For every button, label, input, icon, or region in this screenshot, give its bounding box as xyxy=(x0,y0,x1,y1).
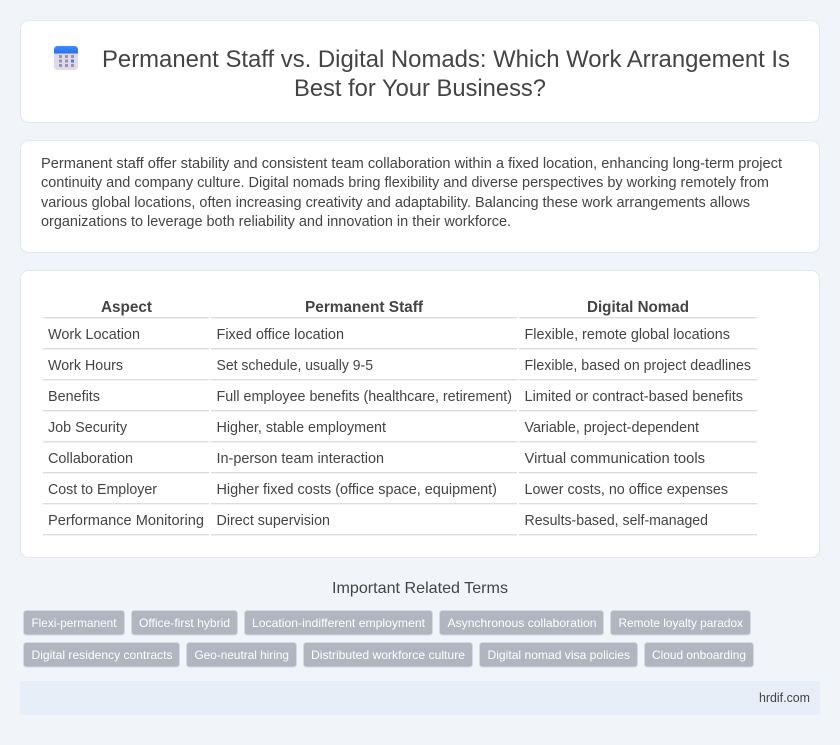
row: performance monitoring: Direct supervision xyxy=(216,513,330,529)
row: work hours xyxy=(43,358,757,380)
summary text: various global locations, often increasing creativity and adaptability. Balancing these work arrangements allows xyxy=(41,195,750,211)
title: Best for Your Business? xyxy=(294,75,546,102)
summary text xyxy=(41,156,782,230)
row: job security: Higher, stable employment xyxy=(216,420,386,436)
icon: calendar xyxy=(54,46,78,70)
tag row 2: Cloud onboarding xyxy=(652,648,746,662)
row: work hours: Work Hours xyxy=(48,358,123,374)
tag row 1 xyxy=(24,610,750,635)
row: cost to employer: Lower costs, no office expenses xyxy=(524,482,728,498)
row: collaboration xyxy=(43,451,757,473)
footer source: hrdif.com xyxy=(759,690,810,705)
row: benefits: Benefits xyxy=(48,389,100,405)
title xyxy=(102,46,790,102)
tag row 2 xyxy=(24,642,754,667)
related term tags xyxy=(24,610,754,667)
row: benefits: Full employee benefits (healthcare, retirement) xyxy=(216,389,512,405)
row: work hours: Flexible, based on project deadlines xyxy=(524,358,751,374)
row: work location: Flexible, remote global locations xyxy=(524,327,730,343)
tag row 1: Asynchronous collaboration xyxy=(448,616,596,630)
row: cost to employer: Cost to Employer xyxy=(48,482,157,498)
row: job security: Job Security xyxy=(48,420,128,436)
row: performance monitoring: Results-based, self-managed xyxy=(524,513,708,529)
row: collaboration: Virtual communication tools xyxy=(524,451,705,467)
tag row 1: Location-indifferent employment xyxy=(252,616,426,630)
row: benefits: Limited or contract-based benefits xyxy=(524,389,743,405)
row: benefits xyxy=(43,389,757,411)
panel: summary paragraph xyxy=(20,140,820,252)
row: work location: Fixed office location xyxy=(216,327,344,343)
tag row 2: Geo-neutral hiring xyxy=(194,648,289,662)
row: collaboration: In-person team interaction xyxy=(216,451,384,467)
row: job security: Variable, project-dependent xyxy=(524,420,699,436)
row: performance monitoring: Performance Monitoring xyxy=(48,513,204,529)
panel: comparison table xyxy=(20,270,820,558)
row: cost to employer xyxy=(43,482,757,504)
row: performance monitoring xyxy=(43,513,757,535)
summary text: Permanent staff offer stability and consistent team collaboration within a fixed location, enhancing long-term project xyxy=(41,156,782,172)
table header row: Permanent Staff xyxy=(305,299,424,316)
row: work hours: Set schedule, usually 9-5 xyxy=(216,358,373,374)
panel: title header xyxy=(20,20,820,122)
summary text: continuity and company culture. Digital nomads bring flexibility and diverse perspectives by working remotely from xyxy=(41,175,769,191)
row: work location xyxy=(43,327,757,349)
table header row xyxy=(43,299,757,318)
row: job security xyxy=(43,420,757,442)
tag row 2: Digital nomad visa policies xyxy=(488,648,630,662)
tag row 2: Digital residency contracts xyxy=(32,648,172,662)
tag row 1: Office-first hybrid xyxy=(139,616,230,630)
row: collaboration: Collaboration xyxy=(48,451,133,467)
title: Permanent Staff vs. Digital Nomads: Which Work Arrangement Is xyxy=(102,46,790,73)
heading: important related terms: Important Related Terms xyxy=(332,580,508,597)
summary text: organizations to leverage both reliability and innovation in their workforce. xyxy=(41,214,511,230)
tag row 1: Remote loyalty paradox xyxy=(618,616,743,630)
tag row 1: Flexi-permanent xyxy=(32,616,117,630)
tag row 2: Distributed workforce culture xyxy=(311,648,465,662)
footer bar xyxy=(20,681,820,715)
row: cost to employer: Higher fixed costs (office space, equipment) xyxy=(216,482,497,498)
table header row: Aspect xyxy=(101,299,153,316)
table header row: Digital Nomad xyxy=(587,299,689,316)
row: work location: Work Location xyxy=(48,327,140,343)
